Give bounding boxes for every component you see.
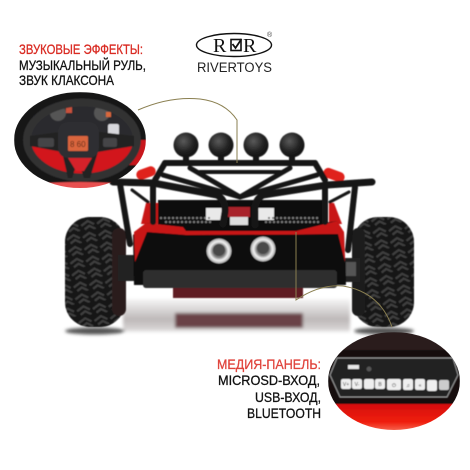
red roll bar ends [135, 165, 346, 183]
button labels [342, 382, 422, 388]
logo: Rivertoys: R [213, 35, 227, 57]
pink lower edge [48, 181, 112, 188]
text: media panel detail: USB-ВХОД, [255, 389, 321, 405]
wheel hub [58, 132, 99, 158]
button labels: « [419, 383, 422, 389]
toy car: rear view [65, 132, 414, 327]
wheel buttons [38, 138, 117, 147]
roof lamps [174, 132, 304, 162]
logo: Rivertoys: R [243, 35, 257, 57]
panel buttons [341, 379, 449, 391]
dashboard inside rim [31, 106, 132, 174]
wheel rim [27, 102, 137, 178]
red fenders [141, 203, 342, 224]
panel body [330, 358, 458, 397]
wheel spokes [30, 132, 134, 178]
floor shadow [65, 299, 414, 334]
button labels: V- [355, 382, 360, 388]
text: sound effects detail: ЗВУК КЛАКСОНА [19, 72, 115, 88]
axle stubs [118, 255, 360, 282]
callout: steering wheel photo [14, 92, 146, 194]
exhaust pipes [206, 236, 276, 264]
text: sound effects detail [19, 56, 146, 88]
logo: Rivertoys [196, 31, 273, 75]
roll cage [113, 163, 372, 250]
audio jack [366, 366, 372, 372]
button labels: ⏻ [392, 383, 396, 389]
heading: media panel: МЕДИЯ-ПАНЕЛЬ: [217, 356, 321, 372]
underbody [173, 286, 303, 298]
button labels: B [378, 382, 382, 388]
button labels: ♫ [406, 383, 410, 389]
callout: media panel photo [328, 332, 460, 432]
left wheel [65, 217, 126, 327]
button labels: V+ [343, 382, 349, 388]
right wheel [352, 217, 414, 327]
heading: sound effects: ЗВУКОВЫЕ ЭФФЕКТЫ: [19, 41, 143, 57]
display: 8 60 [70, 140, 86, 149]
lower bumper [143, 270, 337, 288]
red trim [134, 221, 345, 262]
USB port [348, 365, 359, 369]
text: media panel detail [218, 372, 321, 421]
logo: Rivertoys: ® [267, 31, 273, 39]
engine bay [158, 200, 328, 236]
logo: Rivertoys: RIVERTOYS [197, 60, 272, 75]
rear body [133, 221, 346, 285]
text: sound effects detail: МУЗЫКАЛЬНЫЙ РУЛЬ, [19, 56, 146, 73]
connector line: steering wheel [138, 98, 237, 163]
text: media panel detail: BLUETOOTH [247, 405, 321, 421]
connector line: media panel [296, 232, 392, 327]
text: media panel detail: MICROSD-ВХОД, [218, 372, 320, 388]
